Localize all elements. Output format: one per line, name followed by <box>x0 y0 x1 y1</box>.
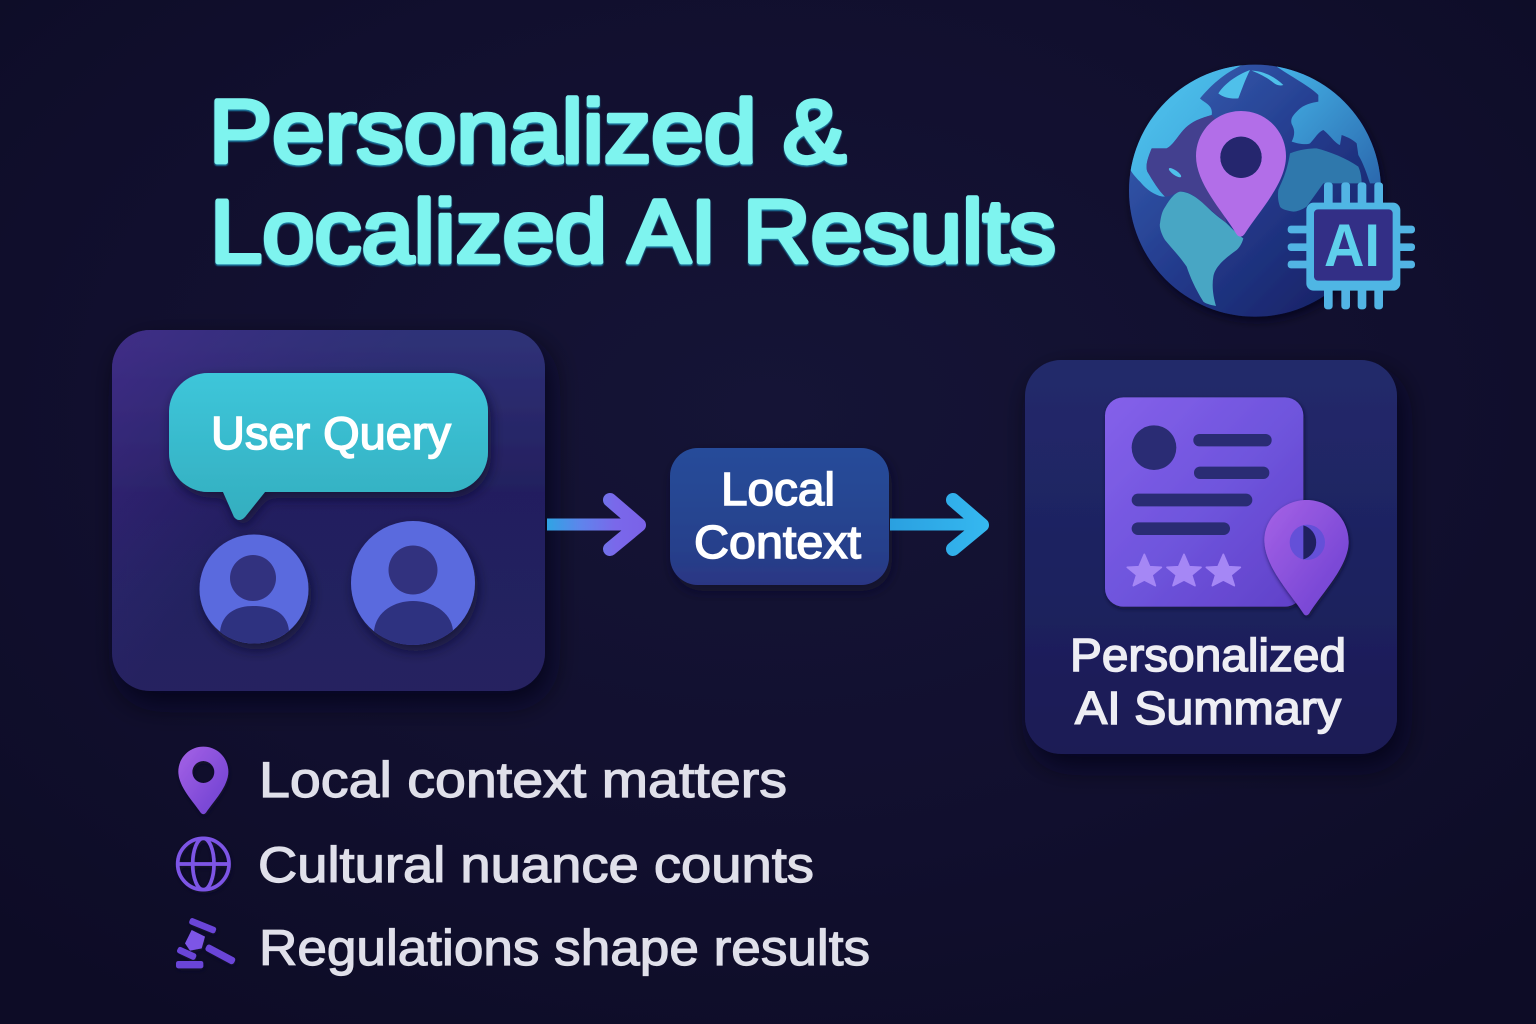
document card <box>1105 397 1349 615</box>
panel: user query <box>112 330 545 691</box>
label: personalized AI summary: Personalized <box>1070 629 1346 681</box>
arrow: local context to summary <box>890 500 982 549</box>
speech bubble: User Query <box>211 407 451 459</box>
icon: bullet globe <box>178 838 229 890</box>
text: cultural nuance counts: Cultural nuance counts <box>258 837 814 893</box>
title: Localized AI Results <box>210 181 1056 281</box>
arrow: query to local context <box>547 500 639 549</box>
label: local context: Local <box>721 463 835 515</box>
AI chip <box>1288 182 1415 309</box>
icon: bullet pin <box>178 747 228 814</box>
title: Personalized & <box>209 81 846 181</box>
AI chip: AI <box>1324 211 1380 279</box>
title <box>209 81 1056 281</box>
label: personalized AI summary <box>1070 629 1346 734</box>
icon: user right <box>351 521 475 645</box>
icon: user left <box>200 534 308 644</box>
label: local context: Context <box>694 516 861 568</box>
icon: globe with location pin and AI chip <box>1127 63 1415 317</box>
label: personalized AI summary: AI Summary <box>1075 682 1341 734</box>
panel: personalized AI summary <box>1025 360 1397 754</box>
text: local context matters: Local context matters <box>259 752 787 808</box>
icon: bullet gavel <box>176 917 236 968</box>
label: local context <box>694 463 861 568</box>
map pin <box>1196 111 1286 237</box>
panel: local context <box>670 448 889 585</box>
speech bubble <box>169 373 488 520</box>
text: regulations shape results: Regulations shape results <box>259 920 870 976</box>
map pin <box>1264 500 1349 615</box>
